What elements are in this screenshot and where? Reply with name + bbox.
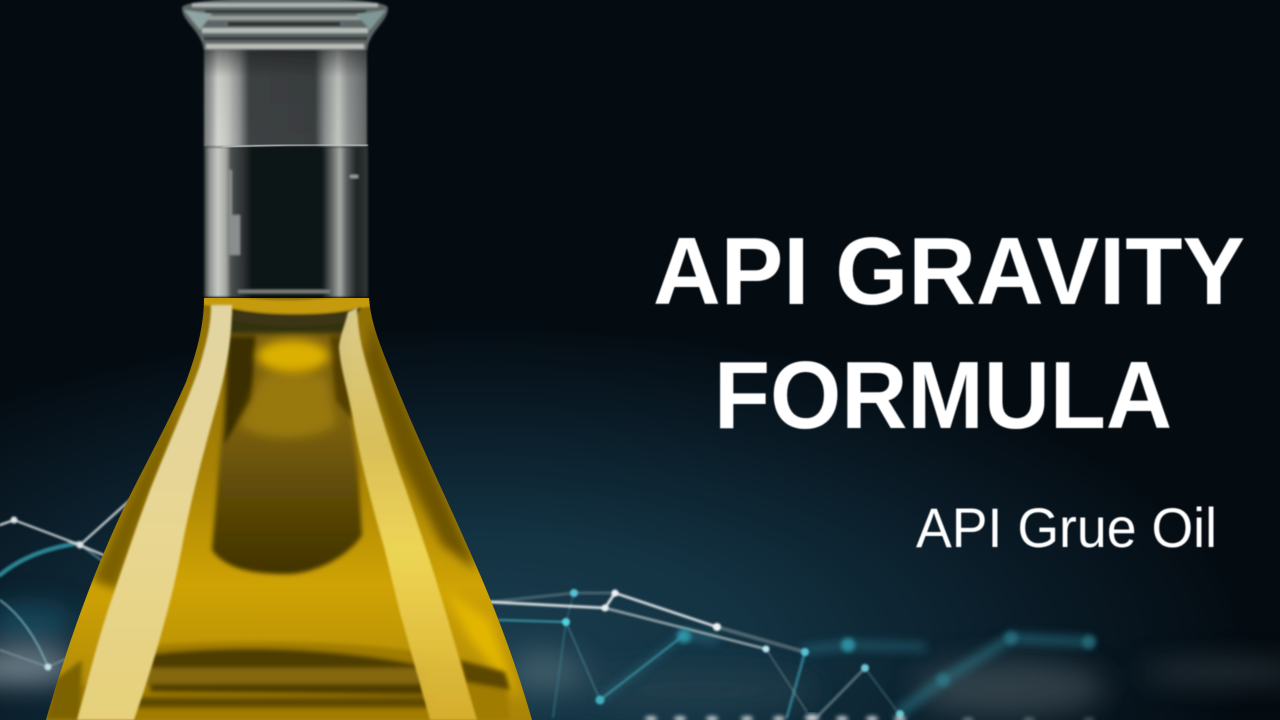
thin lines, right [490,593,900,717]
title line 2: FORMULA [714,342,1172,449]
flask neck [204,46,368,297]
blurred teal nodes [677,629,1096,687]
icon: flask [30,0,550,720]
nodes, right [562,589,904,718]
left network [0,500,130,670]
oil side shading [92,300,520,700]
subtitle: API Grue Oil [916,496,1217,559]
flask body oil [30,290,550,720]
haze clouds [0,605,1280,716]
oil dark reflection [212,312,362,574]
flask lip [182,0,388,50]
chart network backdrop [0,500,1280,720]
meniscus [204,298,370,326]
title [653,218,1245,449]
oil base bands [45,642,510,720]
blurred bottom caption [645,714,1095,720]
right light strip [339,308,477,720]
left light strip [77,305,232,720]
neck upper glass [204,46,367,147]
oil bright core [240,340,336,438]
neck lower glass [204,147,368,297]
teal blurred lines, right [600,635,1089,712]
title line 1: API GRAVITY [653,218,1245,325]
